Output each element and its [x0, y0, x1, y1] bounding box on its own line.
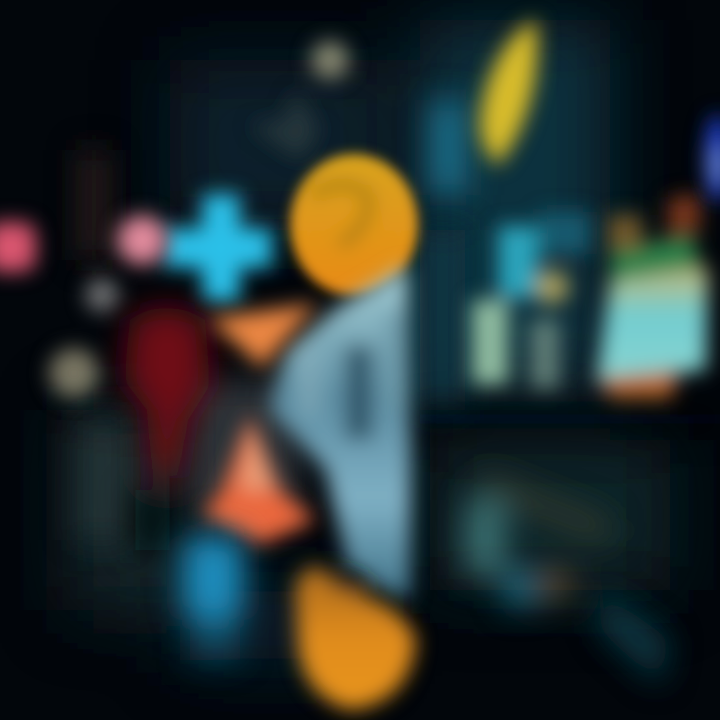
teal column upper middle — [430, 100, 466, 195]
icon: grey dot — [250, 41, 349, 160]
icon: pink circle — [117, 215, 167, 265]
icon: red pink badge at left — [0, 222, 36, 272]
dark red figure — [124, 308, 210, 550]
icon: gold coin — [290, 154, 418, 296]
orange triangle — [208, 303, 318, 368]
blue glow lower left — [182, 535, 244, 660]
right panel with stripes — [596, 194, 708, 400]
blue edge glow right — [705, 114, 720, 202]
small grey dots — [49, 278, 119, 398]
orange blob bottom — [295, 566, 416, 710]
middle right teal panels — [472, 212, 590, 390]
dark horizontal band — [420, 408, 720, 430]
brown pillar and grey haze — [75, 150, 465, 540]
icon: yellow leaf — [480, 20, 537, 166]
icon: cyan plus — [164, 194, 272, 302]
background glow: teal areas — [70, 20, 670, 660]
orange cone — [202, 415, 316, 545]
light blue column — [270, 265, 412, 600]
lower right reflections — [465, 470, 670, 685]
